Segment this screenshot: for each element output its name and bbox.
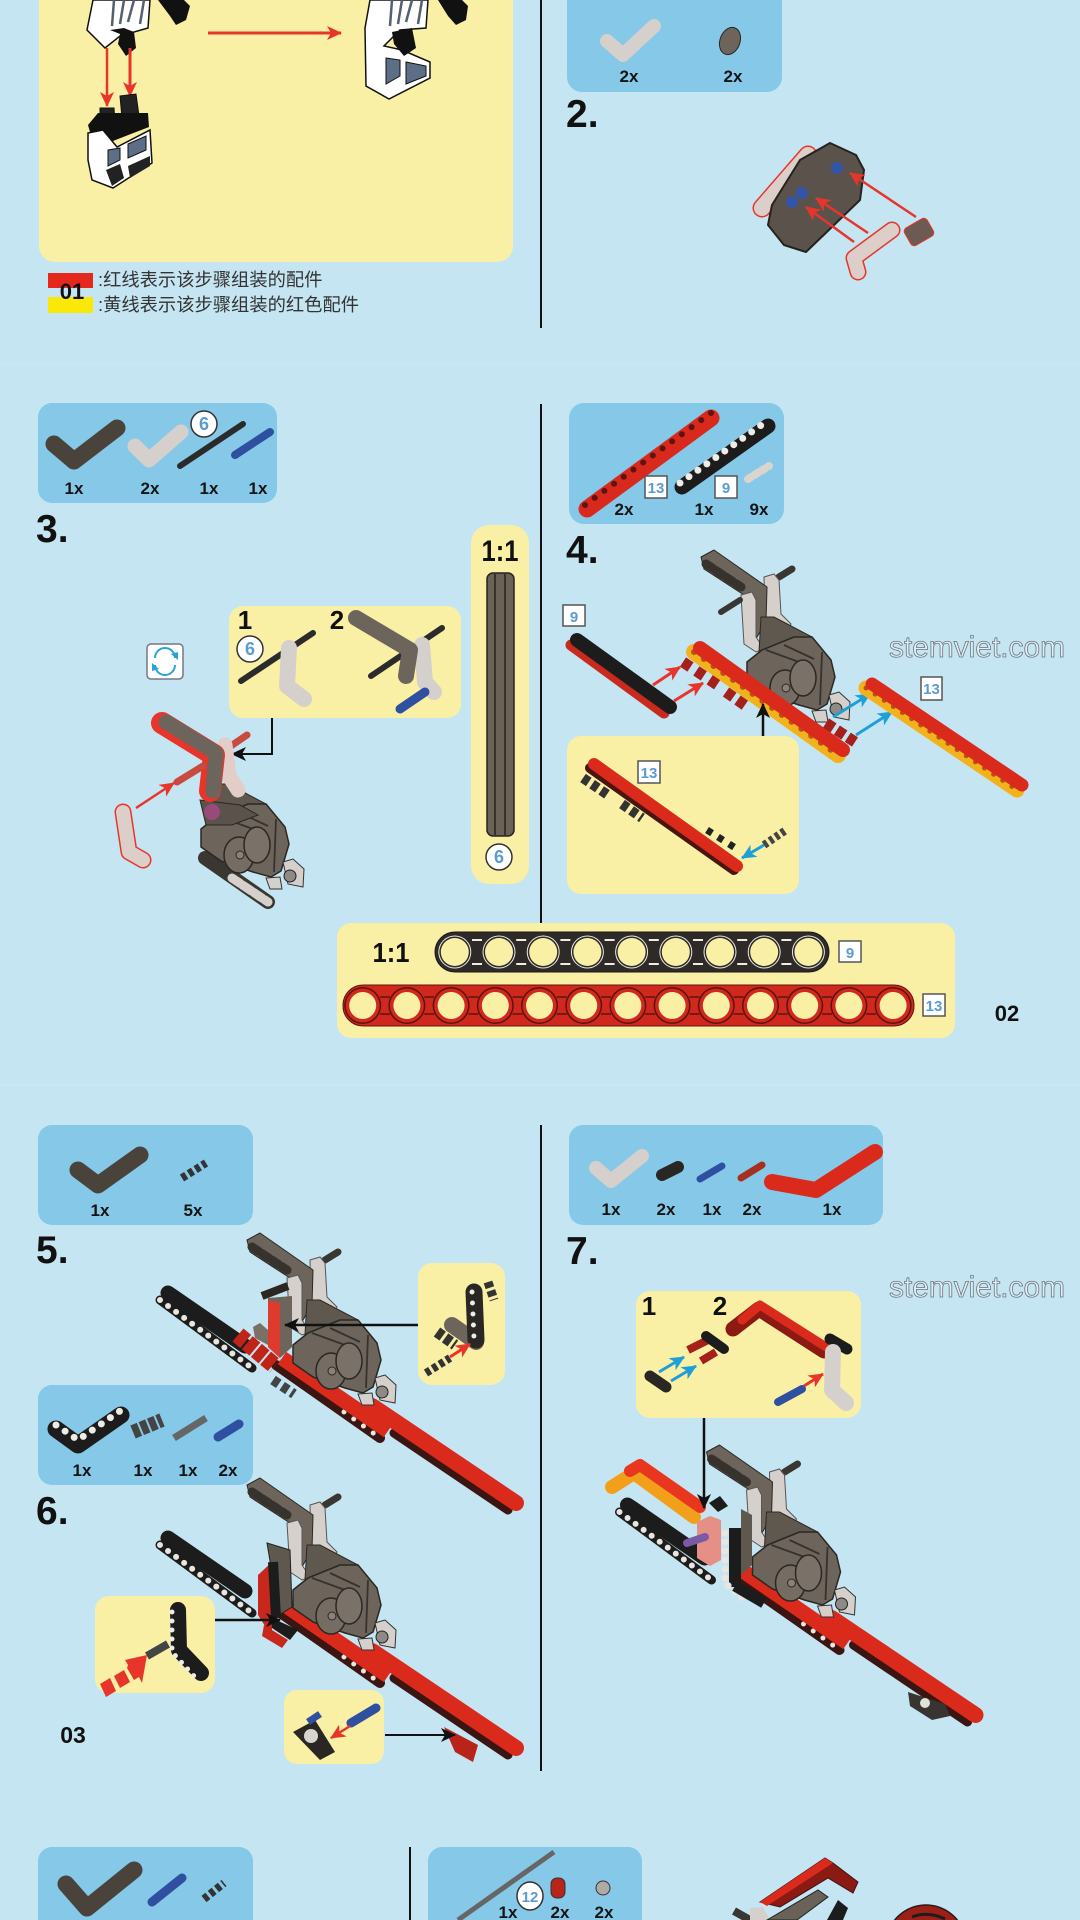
- label: 13: 13: [648, 480, 664, 497]
- parts: red pins right: [826, 723, 855, 742]
- part: long axle: [458, 1852, 554, 1920]
- quantities: 1x: [703, 1200, 722, 1219]
- part: left pins: [437, 1332, 455, 1345]
- substep 2 number: 2: [713, 1291, 727, 1321]
- beam: black 9 holes: [435, 932, 829, 972]
- part: red beam: [590, 764, 737, 870]
- quantities: 1x: [134, 1461, 153, 1480]
- scale label: 1:1: [482, 535, 518, 568]
- heading: step 2: 2.: [566, 93, 599, 136]
- icon: figure legs: [88, 94, 152, 188]
- panel: 1:1 scale axle 6: [471, 525, 529, 884]
- arrow: blue upper: [659, 1357, 684, 1372]
- label: 9: [715, 476, 737, 498]
- panel: step 3 detail: [229, 605, 461, 718]
- arrow: red: [450, 1344, 470, 1357]
- part: grey L with black top: [830, 1339, 847, 1403]
- part: red bent beam: [733, 1305, 826, 1351]
- part: black beam: [827, 1900, 848, 1920]
- part: dark L beam: [66, 1870, 134, 1908]
- part: black beam 9: [680, 421, 768, 487]
- part: black foot: [272, 1618, 298, 1640]
- panel: step 6 parts: [38, 1385, 253, 1485]
- quantities: 1x: [179, 1461, 198, 1480]
- part: pin: [204, 1883, 224, 1899]
- panel: step 4 parts: [569, 403, 784, 524]
- part: link: [662, 1167, 678, 1175]
- substep 1 number: 1: [238, 605, 252, 635]
- part: red outlined L being added: [123, 812, 143, 860]
- part: main red beam: [694, 648, 843, 755]
- part: red bracket: [258, 1562, 272, 1637]
- quantities: 1x: [73, 1461, 92, 1480]
- quantities: [602, 1200, 842, 1219]
- watermark: stemviet.com: [889, 631, 1065, 664]
- panel: step 6 left detail: [95, 1596, 215, 1697]
- part: black beam cap: [709, 1496, 728, 1512]
- part: blue pin: [235, 432, 270, 455]
- beam: red 13 holes: [343, 985, 914, 1026]
- quantities: [91, 1201, 203, 1220]
- part: black L: [172, 1610, 201, 1676]
- quantities: 2x: [141, 479, 160, 498]
- panel: step 7 parts: [569, 1125, 883, 1225]
- part: red bent beam: [772, 1152, 875, 1190]
- label: axle length 6: 6: [199, 414, 209, 434]
- part: pin: [174, 1418, 206, 1438]
- divider: step 8-9: [409, 1847, 411, 1920]
- part: small nut: [596, 1881, 610, 1895]
- part: grey beam: [767, 1890, 828, 1920]
- part: black L beam: [56, 1411, 121, 1445]
- part: blue pin: [700, 1166, 722, 1179]
- legend: colour key and page number 01: [48, 269, 359, 315]
- arrow: blue lower: [671, 1366, 696, 1381]
- label: axle length 6: [191, 411, 217, 437]
- quantities: 2x: [743, 1200, 762, 1219]
- arrow: red upper: [653, 667, 680, 685]
- part: blue pin: [351, 1708, 376, 1723]
- part: pin: [147, 1644, 168, 1656]
- part: black vertical: [273, 1562, 276, 1618]
- arrow: step 3 callout: [232, 718, 272, 754]
- quantities: 2x: [615, 500, 634, 519]
- part: black beam 9: [571, 640, 670, 713]
- heading: step 7: 7.: [566, 1230, 599, 1273]
- part: red pins with link: [688, 1336, 724, 1361]
- icon: rotate model: [147, 644, 183, 679]
- scale label: 1:1: [372, 937, 410, 968]
- illustration: step 4 model: [683, 550, 855, 755]
- label: 13: 13: [926, 998, 942, 1015]
- label: 13: [923, 994, 945, 1016]
- label: axle length 12: [517, 1882, 543, 1910]
- arrow: red: [331, 1726, 350, 1738]
- part: orange/red L: [612, 1465, 700, 1517]
- legend: colour key and page number 01: :红线表示该步骤组装的配件: [98, 269, 322, 290]
- substep 1 number: 1: [642, 1291, 656, 1321]
- part: grey L with axle: [241, 633, 313, 699]
- arrow: left pin down: [106, 48, 108, 106]
- arrow: step 6 left callout: [215, 1619, 280, 1621]
- quantities: 1x: [823, 1200, 842, 1219]
- panel: step 3 parts: [38, 403, 277, 503]
- part: loose pin: [764, 830, 786, 845]
- label: axle length 6: 6: [494, 847, 504, 867]
- part: dark L beam: [78, 1155, 140, 1185]
- arrow: blue lower: [856, 712, 892, 735]
- part: white pins: [273, 1380, 294, 1394]
- icon: upper figure left: [87, 0, 190, 56]
- label: 13: [638, 761, 660, 783]
- panel: step 6 right detail: [284, 1690, 384, 1764]
- part: dark block: [253, 1323, 268, 1345]
- label: 13: 13: [641, 765, 657, 782]
- panel: step 5 parts: [38, 1125, 253, 1225]
- part: grey L: [596, 1156, 642, 1181]
- arrow: thick red: [100, 1655, 147, 1697]
- watermark: stemviet.com: [889, 1271, 1065, 1304]
- legend: colour key and page number 01: :黄线表示该步骤组装的红色配件: [98, 294, 359, 315]
- part: blue pin: [152, 1878, 182, 1902]
- quantities: 1x: [91, 1201, 110, 1220]
- arrow: right pin down: [128, 48, 132, 96]
- quantities: 1x: [65, 479, 84, 498]
- part: red pin: [741, 1165, 762, 1178]
- heading: step 6: 6.: [36, 1490, 69, 1533]
- part: connector piece: [293, 1714, 335, 1760]
- panel: 1:1 scale beams: [337, 923, 955, 1038]
- quantities: [65, 479, 268, 498]
- part: dark vertical: [267, 1543, 292, 1615]
- divider: step 5-7: [540, 1125, 542, 1771]
- label: 9: [839, 941, 861, 962]
- heading: step 5: 5.: [36, 1229, 69, 1272]
- panel: step 8 parts: [38, 1847, 253, 1920]
- part: end connector: [908, 1692, 950, 1720]
- part: dark L beam: [54, 428, 117, 461]
- part: red pins: [238, 1335, 275, 1366]
- label: 9: 9: [846, 945, 854, 962]
- part: dark beam assembly with blue pin: [356, 618, 442, 709]
- label: axle length 12: 12: [522, 1889, 538, 1906]
- illustration: step 3 model: [162, 722, 304, 902]
- arrow: assemble horizontal: [208, 32, 341, 34]
- part: connector: [133, 1420, 162, 1432]
- parts: red pins: [683, 662, 722, 688]
- quantity: 2x: [620, 67, 639, 86]
- part: red bush: [551, 1878, 565, 1898]
- axle: [487, 573, 514, 836]
- part: pin: [182, 1163, 206, 1178]
- label: 9: 9: [570, 609, 578, 626]
- quantities: 1x: [200, 479, 219, 498]
- panel: step 5 detail: [418, 1263, 505, 1385]
- part: blue pin: [778, 1389, 802, 1402]
- page number 02: 02: [995, 1001, 1019, 1026]
- part: link: [650, 1376, 666, 1387]
- part: grey L beam: [607, 26, 654, 55]
- label: 9: 9: [722, 480, 730, 497]
- page number 03: 03: [60, 1722, 86, 1748]
- label: 13: [921, 677, 942, 700]
- arrow: black callout up: [762, 704, 764, 738]
- parts: red pins lower: [726, 692, 746, 706]
- part: top pins: [488, 1282, 494, 1300]
- parts: pins group one: [583, 778, 608, 795]
- illustration: step 9 model: [734, 1858, 966, 1920]
- part: purple ghost pin: [687, 1537, 705, 1543]
- part: wheel: [886, 1905, 966, 1920]
- illustration: step 7 model: [612, 1445, 976, 1722]
- quantity: 2x: [724, 67, 743, 86]
- quantities: [73, 1461, 238, 1480]
- label: 13: [645, 476, 667, 498]
- parts: pins group two: [622, 804, 642, 818]
- arrow: step 5 callout: [285, 1324, 418, 1326]
- illustration: step 5 model: [160, 1233, 516, 1510]
- panel: step 9 parts: [428, 1847, 642, 1920]
- part: grey L beam: [135, 432, 181, 460]
- legend: colour key and page number 01: 01: [60, 279, 84, 304]
- quantities: 1x: [602, 1200, 621, 1219]
- icon: assembled figure right: [365, 0, 468, 99]
- panel: step 4 detail: [567, 736, 799, 894]
- label: axle length 6: 6: [245, 639, 255, 659]
- part: end connector: [444, 1727, 478, 1762]
- part: pink ghost grey L: [697, 1516, 721, 1566]
- arrow: red into step 3 model: [136, 783, 174, 808]
- substep 2 number: 2: [330, 605, 344, 635]
- arrow: blue: [742, 845, 764, 858]
- part: small pin: [748, 466, 769, 479]
- part: dark connector: [716, 24, 744, 58]
- heading: step 4: 4.: [566, 529, 599, 572]
- part: red beam 13: [585, 413, 711, 509]
- part: dark L bracket: [452, 1292, 476, 1342]
- quantities: 9x: [750, 500, 769, 519]
- arrow: step 7 callout: [703, 1418, 705, 1508]
- part: blue pin: [218, 1424, 239, 1437]
- parts: pins group three: [707, 830, 737, 849]
- arrow: step 6 right callout: [385, 1734, 455, 1736]
- quantities: 2x: [219, 1461, 238, 1480]
- panel: step 1 detail with figures: [39, 0, 513, 262]
- part: light connector: [750, 1907, 770, 1920]
- arrow: blue upper: [833, 694, 870, 717]
- label: 9: [563, 605, 585, 626]
- heading: step 3: 3.: [36, 508, 69, 551]
- part: loose pin: [426, 1358, 450, 1373]
- quantities: [499, 1903, 614, 1920]
- label: axle length 6: [486, 844, 512, 870]
- illustration: step 2 model: [762, 143, 935, 272]
- quantities: [615, 500, 769, 519]
- label: 13: 13: [923, 681, 940, 698]
- divider: step 1-2: [540, 0, 542, 328]
- quantities: 2x: [657, 1200, 676, 1219]
- arrow: red: [804, 1374, 823, 1386]
- part: right red beam 13: [866, 684, 1022, 790]
- illustration: step 6 model: [160, 1478, 516, 1762]
- panel: step 2 parts: [567, 0, 782, 92]
- quantities: 5x: [184, 1201, 203, 1220]
- part: black vertical with white edge: [725, 1509, 764, 1603]
- quantities: 1x: [249, 479, 268, 498]
- divider: step 3-4: [540, 404, 542, 923]
- quantities: 1x: [695, 500, 714, 519]
- part: red foot: [262, 1625, 288, 1648]
- arrow: red lower: [674, 683, 703, 701]
- part: dark vertical with red tint: [262, 1286, 292, 1358]
- part: red L arm: [760, 1858, 858, 1907]
- part: axle: [180, 424, 243, 466]
- label: axle length 6: [237, 636, 263, 662]
- panel: step 7 detail: [636, 1291, 861, 1418]
- part: axle: [734, 1911, 750, 1920]
